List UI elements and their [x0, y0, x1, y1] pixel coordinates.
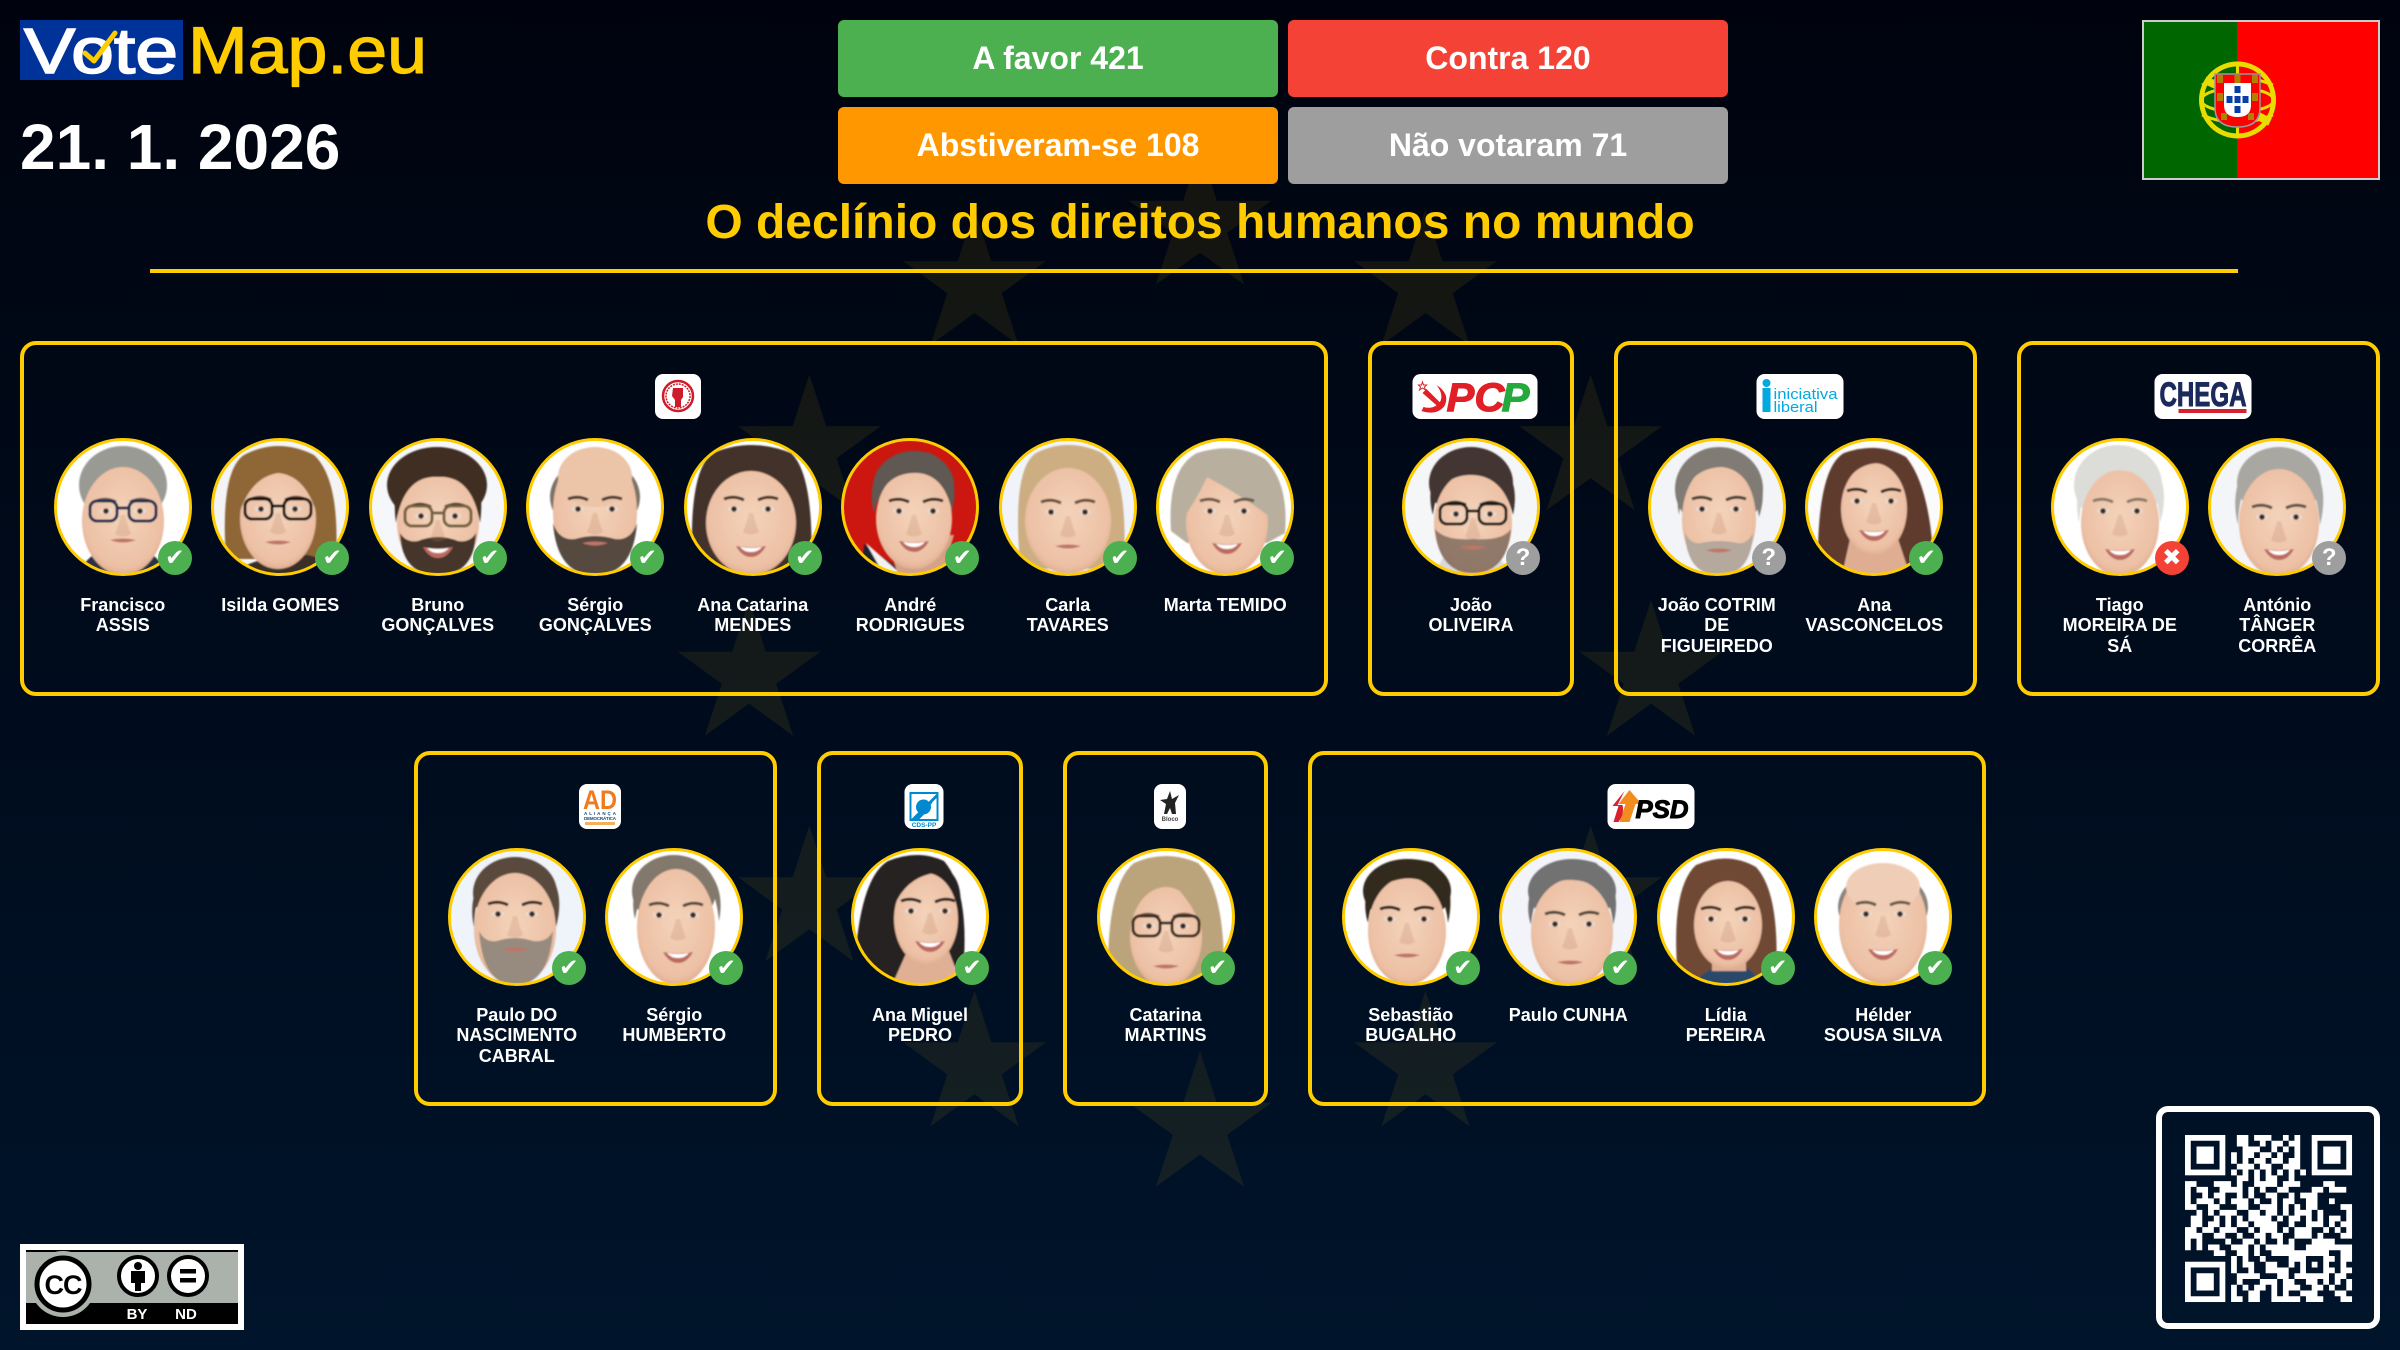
name [80, 594, 165, 635]
portrait [605, 848, 743, 986]
logo: PSD [1608, 784, 1694, 829]
licence badge: CC BY-ND: BY [127, 1306, 147, 1323]
name [1805, 594, 1943, 635]
portrait [1097, 848, 1235, 986]
name: Sebastião [1368, 1004, 1453, 1024]
name: André [884, 594, 936, 614]
vote badge [1446, 951, 1480, 985]
portrait [2051, 438, 2189, 576]
vote badge [473, 541, 507, 575]
name: MOREIRA DE [2063, 615, 2177, 635]
logo: CDS-PP: CDS-PP [912, 822, 937, 829]
name [2063, 594, 2177, 656]
vote badge: ✔ [165, 544, 184, 570]
name [1658, 594, 1776, 656]
name: Sérgio [646, 1004, 702, 1024]
vote badge [1103, 541, 1137, 575]
name [2238, 594, 2316, 656]
name: CORRÊA [2238, 636, 2316, 656]
vote badge [2155, 541, 2189, 575]
portrait [1499, 848, 1637, 986]
vote badge: ✔ [962, 954, 982, 980]
portrait [684, 438, 822, 576]
vote badge: ? [1516, 544, 1530, 571]
name: VASCONCELOS [1805, 615, 1943, 635]
vote badge: ✔ [1453, 954, 1472, 980]
name [856, 594, 965, 635]
name: MENDES [714, 615, 791, 635]
name: Sérgio [567, 594, 623, 614]
portrait [1657, 848, 1795, 986]
logo: Bloco de Esquerda: Bloco [1161, 817, 1178, 823]
members row [448, 848, 743, 1066]
logo: AD: ALIANÇA [584, 811, 616, 816]
name: Hélder [1855, 1004, 1911, 1024]
name: Ana Catarina [697, 594, 808, 614]
vote total: did not vote [1288, 107, 1728, 184]
portrait [2208, 438, 2346, 576]
name: NASCIMENTO [456, 1025, 577, 1045]
member: Carla Tavares [999, 438, 1137, 635]
licence badge: CC BY-ND: CC [44, 1270, 82, 1300]
member: Hélder Sousa Silva [1804, 848, 1962, 1068]
vote badge: ✔ [1268, 544, 1287, 570]
icon: Portuguese flag [2142, 20, 2380, 180]
logo: Iniciativa Liberal: liberal [1773, 399, 1817, 416]
vote badge [1603, 951, 1637, 985]
member: Francisco Assis [54, 438, 192, 635]
vote badge: ✔ [1208, 954, 1227, 980]
vote total: abstained: Abstiveram-se 108 [917, 127, 1199, 163]
name [697, 594, 808, 635]
name: Lídia [1705, 1004, 1747, 1024]
name: João COTRIM [1658, 594, 1776, 614]
name [381, 594, 494, 635]
logo: PCP: P [1502, 376, 1530, 419]
name: PEREIRA [1686, 1025, 1766, 1045]
logo: PCP: PC [1446, 376, 1506, 419]
name [872, 1004, 968, 1045]
vote badge [955, 951, 989, 985]
vote badge: ✔ [1611, 954, 1630, 980]
name [1428, 594, 1514, 635]
portrait [369, 438, 507, 576]
panel: CDS-PP group [817, 751, 1023, 1106]
panel: PSD group [1308, 751, 1986, 1106]
logo: Iniciativa Liberal: iniciativa [1773, 386, 1838, 403]
name: Bruno [411, 594, 464, 614]
vote badge: ✔ [717, 954, 736, 980]
name [539, 594, 652, 635]
member: Sérgio Gonçalves [526, 438, 664, 635]
portrait [526, 438, 664, 576]
portrait [1805, 438, 1943, 576]
panel: AD group [414, 751, 777, 1106]
name: Isilda GOMES [221, 594, 339, 614]
vote badge: ? [1761, 544, 1776, 571]
member: Ana Catarina Mendes [684, 438, 822, 635]
panel: Bloco de Esquerda group [1063, 751, 1268, 1106]
portrait [999, 438, 1137, 576]
vote badge: ✔ [1926, 954, 1945, 980]
name: MARTINS [1124, 1025, 1206, 1045]
vote badge [315, 541, 349, 575]
member: Isilda Gomes [211, 438, 349, 614]
vote badge [630, 541, 664, 575]
members row [1648, 438, 1943, 656]
members row [851, 848, 989, 1045]
member: André Rodrigues [841, 438, 979, 635]
vote badge [709, 951, 743, 985]
member: Tiago Moreira de Sá [2051, 438, 2189, 656]
vote badge: ✔ [1768, 954, 1787, 980]
licence badge: CC BY-ND: ND [175, 1306, 197, 1323]
name: GONÇALVES [381, 615, 494, 635]
portrait [1648, 438, 1786, 576]
vote badge [1918, 951, 1952, 985]
name: BUGALHO [1365, 1025, 1456, 1045]
portrait [1342, 848, 1480, 986]
member: Lídia Pereira [1657, 848, 1795, 1045]
member: João Cotrim de Figueiredo [1648, 438, 1786, 656]
name [1026, 594, 1109, 635]
member: João Oliveira [1402, 438, 1540, 635]
name: CABRAL [479, 1046, 555, 1066]
logo: PS [655, 374, 701, 419]
vote badge: ✔ [559, 954, 578, 980]
portrait [841, 438, 979, 576]
name: Ana [1857, 594, 1891, 614]
name: Francisco [80, 594, 165, 614]
member: Sebastião Bugalho [1342, 848, 1480, 1045]
vote badge: ? [2322, 544, 2337, 571]
logo: Iniciativa Liberal [1756, 374, 1844, 419]
logo: CDS-PP [904, 784, 944, 829]
name: DE [1704, 615, 1729, 635]
vote badge [158, 541, 192, 575]
member: Ana Miguel Pedro [851, 848, 989, 1045]
panel: Iniciativa Liberal group [1614, 341, 1977, 696]
name [1686, 1004, 1766, 1045]
member: Bruno Gonçalves [369, 438, 507, 635]
vote total: against [1288, 20, 1728, 97]
vote badge: ✔ [1917, 544, 1936, 570]
members row [1097, 848, 1235, 1045]
vote badge: ✔ [480, 544, 499, 570]
name: GONÇALVES [539, 615, 652, 635]
name: António [2243, 594, 2311, 614]
member: Catarina Martins [1097, 848, 1235, 1045]
licence badge: CC BY-ND [20, 1244, 244, 1330]
vote badge [1761, 951, 1795, 985]
name [1124, 1004, 1206, 1045]
name: TÂNGER [2239, 615, 2315, 635]
title: O declínio dos direitos humanos no mundo [705, 196, 1695, 249]
name: PEDRO [888, 1025, 952, 1045]
name: TAVARES [1027, 615, 1109, 635]
vote total: abstained [838, 107, 1278, 184]
date: 21. 1. 2026 [20, 111, 340, 183]
name: HUMBERTO [622, 1025, 726, 1045]
vote badge [1260, 541, 1294, 575]
portrait [1814, 848, 1952, 986]
name: ASSIS [96, 615, 150, 635]
members row [1402, 438, 1540, 635]
member: Marta Temido [1156, 438, 1294, 614]
portrait [211, 438, 349, 576]
name: Paulo DO [476, 1004, 557, 1024]
panel: PS group [20, 341, 1328, 696]
vote badge [945, 541, 979, 575]
name: Paulo CUNHA [1509, 1004, 1628, 1024]
name [622, 1004, 726, 1045]
name: SOUSA SILVA [1824, 1025, 1943, 1045]
logo: Bloco de Esquerda [1154, 784, 1186, 829]
portrait [54, 438, 192, 576]
name [1365, 1004, 1456, 1045]
logo: AD: AD [582, 785, 616, 815]
vote badge [788, 541, 822, 575]
panel: PCP group [1368, 341, 1574, 696]
member: Ana Vasconcelos [1805, 438, 1943, 635]
vote badge [1506, 541, 1540, 575]
member: Paulo do Nascimento Cabral [448, 848, 586, 1066]
members row [1342, 848, 1952, 1045]
vote badge: ✔ [638, 544, 657, 570]
vote badge [1909, 541, 1943, 575]
vote badge [552, 951, 586, 985]
vote total: against: Contra 120 [1425, 40, 1591, 76]
vote badge: ✖ [2162, 544, 2181, 570]
vote badge: ✔ [1110, 544, 1129, 570]
logo: AD: DEMOCRÁTICA [584, 815, 616, 821]
name: Marta TEMIDO [1164, 594, 1287, 614]
name: Catarina [1129, 1004, 1202, 1024]
name [1794, 1004, 1972, 1046]
logo: VoteMap.eu [20, 20, 427, 88]
logo: AD [579, 784, 621, 829]
member: Paulo Cunha [1499, 848, 1637, 1024]
QR code [2156, 1106, 2380, 1329]
member: António Tânger Corrêa [2208, 438, 2346, 656]
vote badge: ✔ [795, 544, 814, 570]
name [456, 1004, 577, 1066]
vote total: did not vote: Não votaram 71 [1389, 127, 1627, 163]
vote badge [1200, 951, 1234, 985]
name: João [1450, 594, 1492, 614]
vote total: in favour: A favor 421 [972, 40, 1144, 76]
member: Sérgio Humberto [605, 848, 743, 1045]
name: Tiago [2096, 594, 2144, 614]
name: SÁ [2107, 636, 2132, 656]
vote badge: ✔ [323, 544, 342, 570]
logo: PSD: PSD [1636, 796, 1688, 824]
portrait [1402, 438, 1540, 576]
portrait [1156, 438, 1294, 576]
vote badge [1752, 541, 1786, 575]
logo: PCP [1412, 374, 1538, 419]
members row [2051, 438, 2346, 656]
name: FIGUEIREDO [1661, 636, 1773, 656]
portrait [851, 848, 989, 986]
members row [54, 438, 1294, 635]
name: Ana Miguel [872, 1004, 968, 1024]
name: OLIVEIRA [1428, 615, 1514, 635]
name: Carla [1045, 594, 1090, 614]
vote total: in favour [838, 20, 1278, 97]
vote badge [2312, 541, 2346, 575]
portrait [448, 848, 586, 986]
name: RODRIGUES [856, 615, 965, 635]
vote badge: ✔ [953, 544, 972, 570]
panel: Chega group [2017, 341, 2380, 696]
